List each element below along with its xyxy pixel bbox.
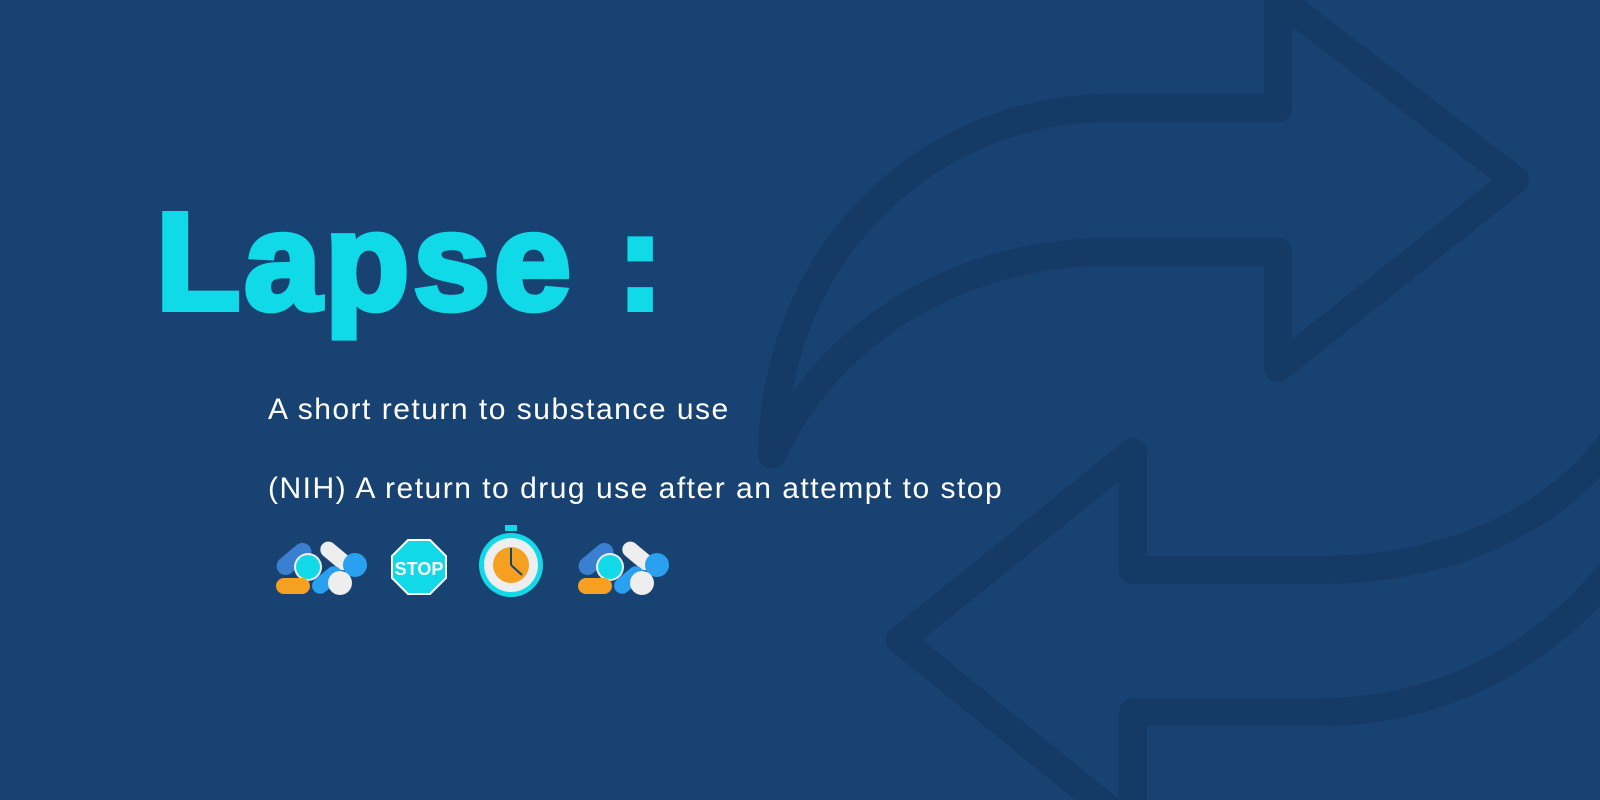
icon row — [276, 525, 669, 597]
icon: pills — [273, 538, 367, 597]
icon: pills 2 — [575, 538, 669, 597]
definition 2 NIH: (NIH) A return to drug use after an attempt to stop — [268, 472, 1003, 505]
icon: stop sign — [392, 540, 446, 594]
title: Lapse : — [156, 185, 667, 339]
icon: stopwatch — [479, 525, 543, 597]
icon: stop sign: STOP — [395, 559, 443, 579]
definition 1: A short return to substance use — [268, 393, 730, 426]
